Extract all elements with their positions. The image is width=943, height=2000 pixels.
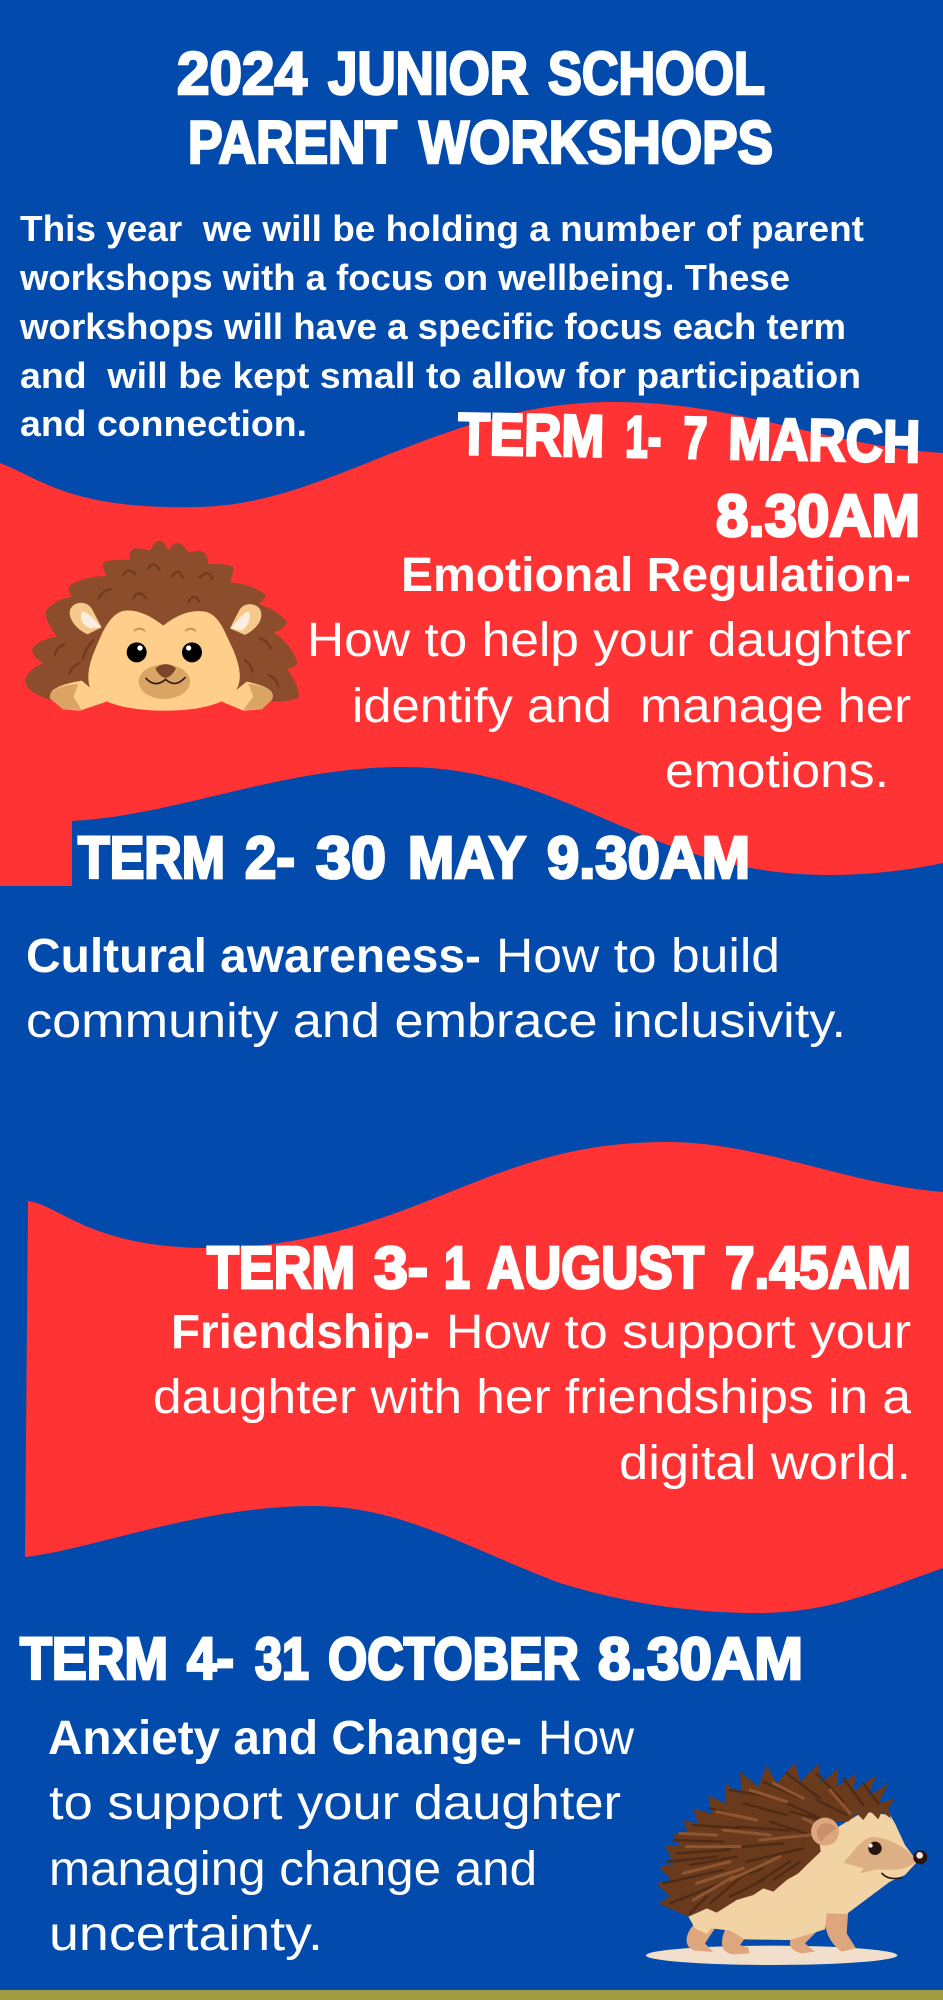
title <box>177 40 773 176</box>
term 1 heading: 1- <box>625 404 662 471</box>
term 1 description: emotions. <box>665 745 889 798</box>
term 4 description: How <box>538 1712 634 1765</box>
title: SCHOOL <box>548 40 765 107</box>
term 1 heading: MARCH <box>728 406 921 475</box>
term 3 description: daughter with her friendships in a <box>153 1371 911 1424</box>
term 4 heading: OCTOBER <box>328 1626 579 1692</box>
term 1 heading: TERM <box>458 401 605 470</box>
term 3 heading <box>207 1235 911 1301</box>
term 2 description: How to build <box>496 930 780 983</box>
term 4 heading: TERM <box>20 1626 168 1692</box>
term 1 heading: 8.30AM <box>716 483 920 549</box>
red wave: term 3 <box>25 1142 943 1613</box>
term 1 heading: 7 <box>683 405 708 471</box>
red wave: term 1 <box>0 402 943 886</box>
term 3 heading: 7.45AM <box>725 1235 911 1301</box>
title: JUNIOR <box>328 40 528 107</box>
term 1 description <box>307 549 911 798</box>
term 4 description: Anxiety and Change- <box>48 1712 522 1765</box>
intro text: This year we will be holding a number of parent <box>20 208 864 249</box>
title: PARENT <box>188 109 397 176</box>
term 4 description <box>48 1712 634 1961</box>
intro text: and connection. <box>20 403 307 444</box>
term 2 heading: TERM <box>78 825 225 891</box>
term 2 heading: 2- <box>245 825 295 891</box>
term 4 heading: 8.30AM <box>598 1626 803 1692</box>
intro text <box>19 208 864 444</box>
term 1 heading <box>458 401 921 549</box>
term 1 description: Emotional Regulation- <box>401 549 911 602</box>
title: 2024 <box>177 40 308 107</box>
term 3 heading: TERM <box>207 1235 355 1301</box>
term 3 description <box>153 1306 911 1490</box>
term 3 heading: 1 <box>444 1235 470 1301</box>
term 2 description <box>26 930 846 1048</box>
term 3 description: Friendship- <box>171 1306 430 1359</box>
term 2 description: community and embrace inclusivity. <box>26 995 846 1048</box>
term 3 heading: 3- <box>374 1235 428 1301</box>
term 2 heading: 9.30AM <box>547 825 750 891</box>
title: WORKSHOPS <box>419 109 773 176</box>
term 3 description: digital world. <box>619 1437 911 1490</box>
term 3 heading: AUGUST <box>487 1235 704 1301</box>
term 4 description: to support your daughter <box>49 1777 621 1830</box>
icon: cartoon hedgehog lying down <box>25 541 299 711</box>
term 4 description: uncertainty. <box>49 1908 323 1961</box>
term 2 heading <box>78 825 750 891</box>
term 4 description: managing change and <box>49 1843 537 1896</box>
intro text: workshops with a focus on wellbeing. These <box>19 257 790 298</box>
intro text: and will be kept small to allow for participation <box>20 355 861 396</box>
term 3 description: How to support your <box>446 1306 911 1359</box>
term 2 heading: 30 <box>316 825 386 891</box>
intro text: workshops will have a specific focus each term <box>19 306 846 347</box>
term 1 description: identify and manage her <box>352 680 911 733</box>
term 4 heading: 4- <box>187 1626 234 1692</box>
footer strip <box>0 1990 943 2000</box>
icon: realistic hedgehog walking <box>646 1763 927 1965</box>
term 4 heading: 31 <box>255 1626 309 1692</box>
term 4 heading <box>20 1626 803 1692</box>
term 2 heading: MAY <box>408 825 526 891</box>
term 1 description: How to help your daughter <box>307 614 911 667</box>
term 2 description: Cultural awareness- <box>26 930 481 983</box>
